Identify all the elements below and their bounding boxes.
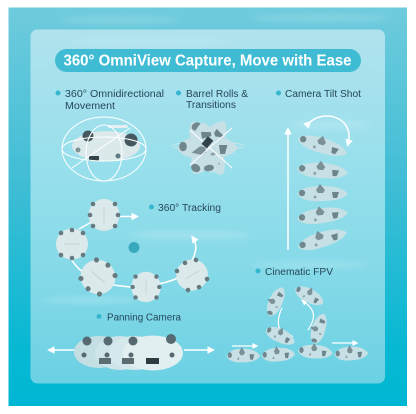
arrows: fpv motion bbox=[232, 301, 356, 346]
label: barrel rolls: Transitions bbox=[186, 100, 236, 111]
icon: drone in gyroscope rings bbox=[62, 117, 146, 181]
icon: panning camera drones bbox=[74, 334, 183, 370]
center point bbox=[128, 242, 140, 253]
label: barrel rolls bbox=[176, 89, 248, 111]
label: 360 tracking: 360° Tracking bbox=[158, 203, 221, 214]
label: 360 omnidirectional movement: 360° Omnidirectional bbox=[65, 89, 164, 100]
icon: fpv drones bbox=[226, 281, 368, 362]
tracking drones bbox=[56, 199, 214, 302]
icon: tilt shot drone stack bbox=[295, 129, 350, 254]
inner translucent panel bbox=[30, 30, 385, 384]
label: barrel rolls: Barrel Rolls & bbox=[186, 89, 248, 100]
label: 360 omnidirectional movement: Movement bbox=[65, 101, 115, 112]
water streaks bbox=[60, 14, 390, 24]
icon: barrel roll drones bbox=[172, 113, 244, 180]
arrow: tilt rotation bbox=[309, 116, 349, 144]
label: 360 omnidirectional movement bbox=[56, 89, 164, 112]
arrows: panning left and right bbox=[50, 349, 212, 351]
label: camera tilt shot: Camera Tilt Shot bbox=[285, 89, 361, 100]
label: panning camera: Panning Camera bbox=[107, 312, 181, 324]
label: cinematic fpv: Cinematic FPV bbox=[265, 267, 333, 278]
title pill: 360° OmniView Capture, Move with Ease bbox=[64, 52, 352, 70]
arrow: vertical rise bbox=[287, 130, 289, 250]
light streaks on panel bbox=[40, 38, 370, 303]
tracking path arrows bbox=[69, 216, 196, 287]
